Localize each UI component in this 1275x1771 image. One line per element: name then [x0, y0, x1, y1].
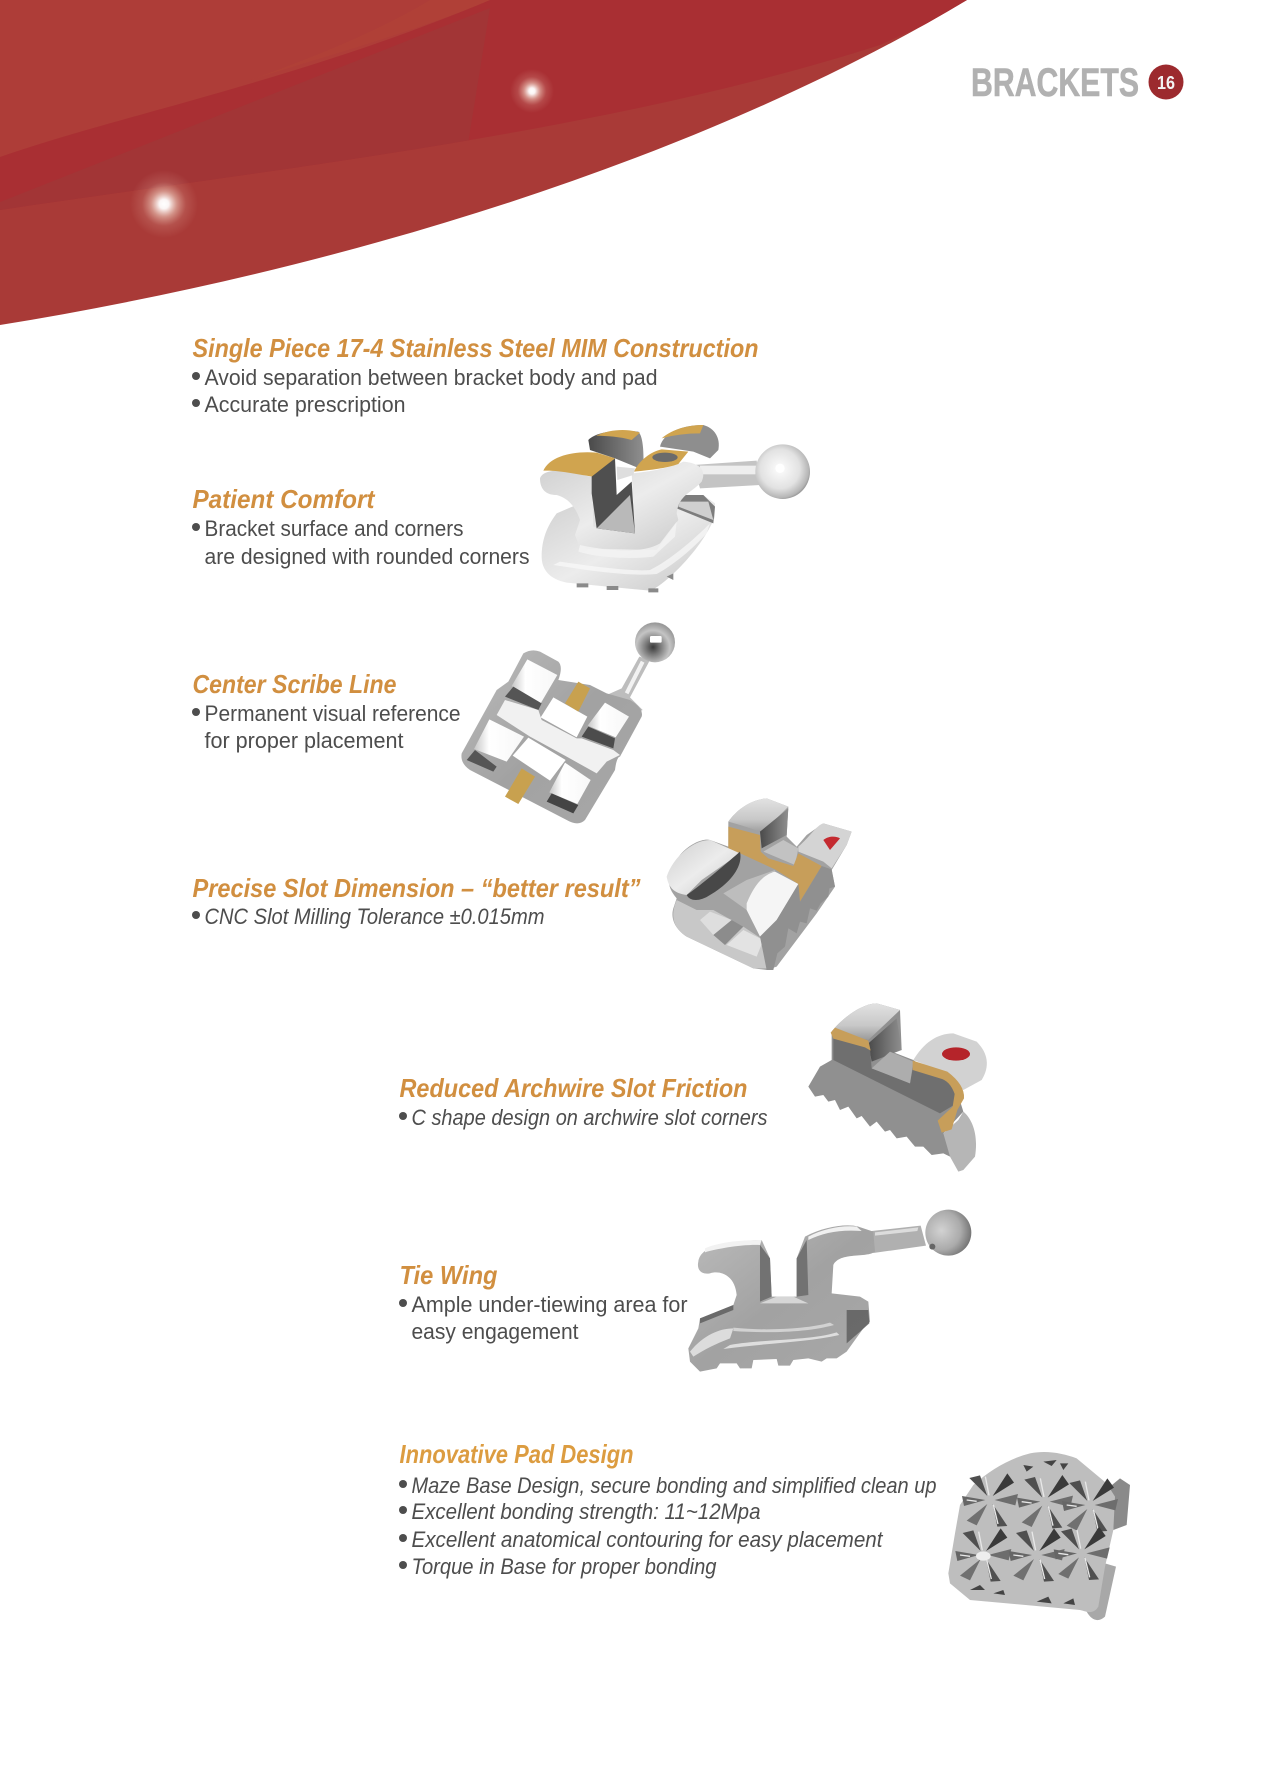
section: reduced archwire slot friction [399, 1073, 768, 1130]
section: innovative pad design: Excellent anatomical contouring for easy placement [412, 1527, 883, 1552]
section: reduced archwire slot friction: Reduced Archwire Slot Friction [400, 1073, 748, 1103]
section: single piece construction: Avoid separation between bracket body and pad [204, 365, 658, 390]
section: precise slot dimension: Precise Slot Dimension – “better result” [192, 873, 640, 903]
section: center scribe line [192, 669, 460, 753]
section: center scribe line: Center Scribe Line [192, 669, 396, 699]
section: tie wing [399, 1260, 688, 1344]
bracket image: slot side view with red dot [667, 798, 852, 970]
bracket image: tie wing side view [688, 1210, 971, 1372]
section: precise slot dimension: CNC Slot Milling Tolerance ±0.015mm [204, 904, 544, 929]
page number badge [1148, 64, 1184, 100]
section: innovative pad design: Torque in Base for proper bonding [412, 1554, 717, 1579]
section: single piece construction: Single Piece 17-4 Stainless Steel MIM Construction [192, 333, 758, 363]
section: patient comfort [192, 484, 530, 569]
section: patient comfort: are designed with rounded corners [204, 544, 530, 569]
page number badge: 16 [1157, 73, 1175, 93]
section: single piece construction: Accurate prescription [204, 392, 406, 417]
bracket image: maze base pad [948, 1452, 1130, 1620]
section: reduced archwire slot friction: C shape design on archwire slot corners [412, 1105, 768, 1130]
section: patient comfort: Patient Comfort [192, 484, 376, 514]
red swoosh banner [0, 0, 980, 330]
page title: BRACKETS [971, 61, 1139, 105]
section: innovative pad design [399, 1439, 936, 1579]
lens flare: right [510, 69, 554, 113]
section: patient comfort: Bracket surface and corners [204, 516, 464, 541]
bracket image: gold wings with hook [540, 425, 810, 592]
lens flare: left [130, 170, 198, 238]
bracket image: C shape slot [808, 1003, 987, 1172]
section: innovative pad design: Maze Base Design, secure bonding and simplified clean up [412, 1473, 936, 1498]
section: tie wing: easy engagement [412, 1319, 578, 1344]
section: single piece construction [192, 333, 758, 417]
section: precise slot dimension [192, 873, 640, 929]
section: tie wing: Ample under-tiewing area for [412, 1292, 688, 1317]
section: innovative pad design: Excellent bonding strength: 11~12Mpa [412, 1499, 760, 1524]
section: tie wing: Tie Wing [400, 1260, 498, 1290]
section: innovative pad design: Innovative Pad Design [400, 1439, 634, 1469]
bracket image: center scribe line top view [461, 622, 675, 823]
section: center scribe line: Permanent visual reference [204, 701, 460, 726]
section: center scribe line: for proper placement [204, 728, 404, 753]
